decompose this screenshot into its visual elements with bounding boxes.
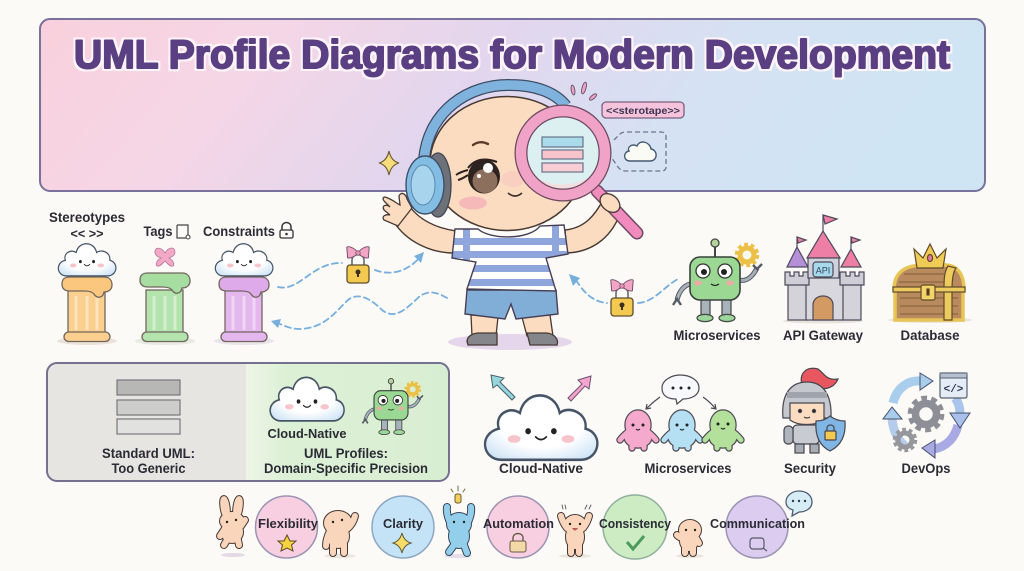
arrowheads left xyxy=(271,252,424,328)
icon: API gateway castle: API xyxy=(816,266,830,276)
badge: Flexibility xyxy=(256,496,319,558)
magnifying glass xyxy=(521,111,637,233)
character: waving figure xyxy=(324,514,356,558)
badge: Consistency: Consistency xyxy=(599,516,672,531)
badge: Automation: Automation xyxy=(483,516,554,531)
profile cloud xyxy=(270,377,344,421)
legs xyxy=(467,315,558,345)
pillar: constraints xyxy=(214,244,274,345)
badge: Consistency xyxy=(599,495,672,559)
sparkle xyxy=(379,151,399,175)
dashed cloud callout xyxy=(611,132,666,171)
icon: database treasure chest xyxy=(888,244,972,323)
badge: Flexibility: Flexibility xyxy=(258,516,319,531)
label: API Gateway: API Gateway xyxy=(783,328,863,343)
label: DevOps: DevOps xyxy=(902,461,950,476)
head xyxy=(430,96,584,230)
label: Tags with document icon xyxy=(144,224,190,239)
label: Constraints with lock icon: Constraints xyxy=(203,224,275,239)
character: small waving figure xyxy=(676,523,704,558)
label: Stereotypes xyxy=(49,210,125,241)
generic UML class box xyxy=(117,380,180,434)
standard UML text: Too Generic xyxy=(112,461,186,476)
stereotype tag pill: <<sterotape>> xyxy=(606,105,680,117)
label: Microservices lower: Microservices xyxy=(644,461,732,476)
label: Stereotypes: << >> xyxy=(70,226,104,241)
icon: microservices robot xyxy=(673,239,762,322)
character: bunny xyxy=(220,499,245,557)
icon: security knight xyxy=(783,368,845,453)
label: Stereotypes: Stereotypes xyxy=(49,210,125,225)
label: Security: Security xyxy=(784,461,836,476)
mascot character xyxy=(379,82,637,350)
arrowhead right xyxy=(569,274,580,286)
badge: Communication xyxy=(710,496,805,558)
icon: microservices trio xyxy=(620,375,741,448)
badge: Communication: Communication xyxy=(710,516,805,531)
badge: Automation xyxy=(483,496,554,558)
pillar: stereotypes xyxy=(57,244,117,345)
character: cheering figure xyxy=(559,505,591,558)
label: Cloud-Native: Cloud-Native xyxy=(499,461,583,476)
profile text: Domain-Specific Precision xyxy=(264,461,428,476)
profile text xyxy=(264,446,428,476)
title: UML Profile Diagrams for Modern Development xyxy=(74,33,950,77)
emphasis marks xyxy=(570,82,598,101)
ground shadow xyxy=(448,334,572,350)
right arm xyxy=(565,200,620,253)
cloud-native caption: Cloud-Native xyxy=(268,427,347,441)
dashed arrows right xyxy=(576,278,680,303)
speech bubble xyxy=(786,491,812,516)
badge: Clarity: Clarity xyxy=(383,516,424,531)
ribbon lock right xyxy=(611,280,633,316)
headphone ear cup xyxy=(406,153,451,217)
pillar: tags xyxy=(135,248,195,345)
dashed arrows left xyxy=(276,256,447,329)
face xyxy=(456,142,525,210)
label: Tags with document icon: Tags xyxy=(144,224,172,239)
stereotype tag pill xyxy=(602,102,684,118)
shorts xyxy=(465,290,558,319)
icon: DevOps cycle: </> xyxy=(944,384,964,396)
icon: cloud-native xyxy=(485,375,597,460)
ribbon lock left xyxy=(347,247,369,283)
banner panel xyxy=(40,19,985,191)
left arm and hand xyxy=(383,193,456,253)
label: Database: Database xyxy=(900,328,960,343)
striped shirt xyxy=(445,224,575,291)
icon: DevOps cycle xyxy=(883,373,970,458)
standard UML text xyxy=(102,446,195,476)
headphones band xyxy=(424,85,566,160)
profile text: UML Profiles: xyxy=(304,446,388,461)
profile robot xyxy=(362,378,423,435)
badge: Clarity xyxy=(372,496,434,558)
icon: API gateway castle xyxy=(783,215,864,324)
comparison panel xyxy=(47,363,449,481)
character: blue figure with idea bulb xyxy=(444,486,472,558)
label: Microservices top: Microservices xyxy=(674,328,760,343)
standard UML text: Standard UML: xyxy=(102,446,195,461)
